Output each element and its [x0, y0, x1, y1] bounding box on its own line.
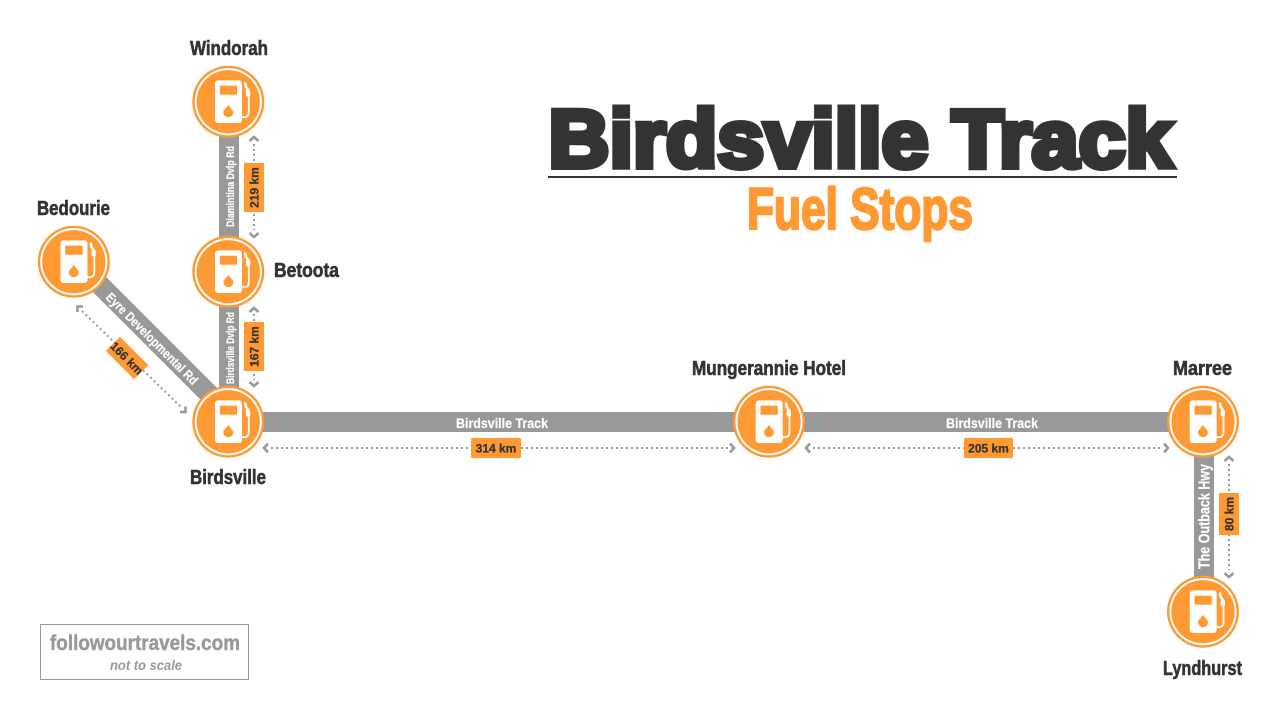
distance: Bedourie to Birdsville 166 km: [78, 306, 186, 412]
distance: Betoota to Birdsville 167 km: [244, 308, 264, 386]
road label: Diamintina Dvlp Rd: Diamintina Dvlp Rd: [225, 146, 237, 227]
road: The Outback Hwy: [1194, 440, 1214, 590]
road label: The Outback Hwy: The Outback Hwy: [1196, 464, 1214, 569]
credit box: not to scale: [110, 657, 182, 673]
place label: Mungerannie Hotel: Mungerannie Hotel: [692, 358, 846, 380]
place label: Betoota: Betoota: [274, 260, 340, 282]
road label: Eyre Developmental Rd: Eyre Developmental Rd: [103, 290, 201, 388]
icon: Betoota fuel stop: [192, 236, 264, 308]
credit box: followourtravels.com: [50, 632, 240, 655]
icon: Birdsville fuel stop: [192, 386, 264, 458]
distance: Birdsville to Mungerannie 314 km: 314 km: [476, 442, 516, 456]
road label: Birdsville Dvlp Rd: Birdsville Dvlp Rd: [225, 312, 237, 384]
place label: Marree: Marree: [1173, 358, 1232, 380]
road label: Birdsville Track east: Birdsville Track: [946, 415, 1038, 431]
title rule: [548, 176, 1177, 178]
distance: Mungerannie to Marree 205 km: [806, 438, 1168, 458]
road: Diamantina Dvlp Rd, Windorah to Betoota: [219, 130, 239, 245]
icon: Marree fuel stop: [1167, 386, 1239, 458]
road label: Birdsville Track west: Birdsville Track: [456, 415, 548, 431]
icon: Bedourie fuel stop: [38, 226, 110, 298]
road: Birdsville Track, Mungerannie to Marree: [790, 412, 1190, 432]
place label: Lyndhurst: Lyndhurst: [1163, 658, 1242, 680]
icon: Windorah fuel stop: [192, 66, 264, 138]
title: Birdsville Track: [548, 94, 1173, 185]
subtitle: Fuel Stops: [747, 177, 973, 242]
distance: Marree to Lyndhurst 80 km: [1219, 457, 1239, 577]
distance: Birdsville to Mungerannie 314 km: [264, 438, 734, 458]
distance: Betoota to Birdsville 167 km: 167 km: [248, 326, 262, 367]
credit box: [40, 624, 248, 680]
icon: Lyndhurst fuel stop: [1167, 576, 1239, 648]
icon: Mungerannie Hotel fuel stop: [733, 386, 805, 458]
distance: Windorah to Betoota 219 km: 219 km: [248, 167, 262, 208]
place label: Windorah: Windorah: [190, 38, 268, 60]
place label: Bedourie: Bedourie: [37, 198, 110, 220]
distance: Bedourie to Birdsville 166 km: 166 km: [107, 339, 146, 378]
road: Birdsville Dvlp Rd, Betoota to Birdsville: [219, 300, 239, 395]
road: Birdsville Track, Birdsville to Mungerannie: [240, 412, 750, 432]
place label: Birdsville: Birdsville: [190, 467, 266, 489]
road: Eyre Developmental Rd: [74, 259, 228, 413]
distance: Windorah to Betoota 219 km: [244, 137, 264, 237]
distance: Marree to Lyndhurst 80 km: 80 km: [1222, 497, 1236, 531]
distance: Mungerannie to Marree 205 km: 205 km: [968, 442, 1009, 456]
